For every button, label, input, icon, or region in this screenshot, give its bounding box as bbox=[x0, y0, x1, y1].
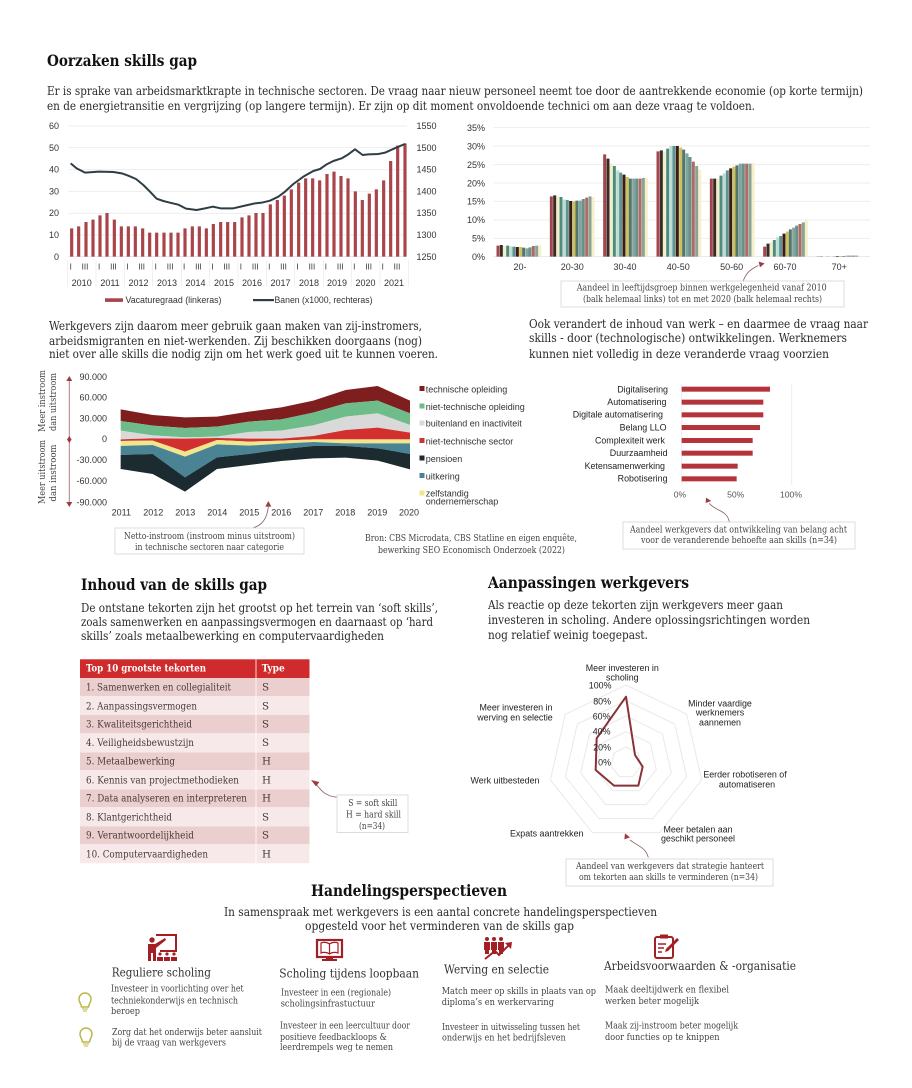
line and bar chart: vacaturegraad en banen: III bbox=[82, 262, 88, 272]
area chart: netto-instroom bbox=[76, 372, 419, 518]
callout: aandeel werkgevers strategie: Aandeel van werkgevers dat strategie hanteert bbox=[575, 861, 764, 872]
bar chart: ontwikkelingen van belang: Duurzaamheid bbox=[610, 448, 668, 458]
callout: soft skill en hard skill: (n=34) bbox=[359, 821, 385, 832]
text block: zij-instromers: niet over alle skills die nodig zijn om het werk goed uit te kunnen voeren. bbox=[49, 347, 438, 361]
bar chart: aandeel per leeftijdsgroep: 20% bbox=[467, 178, 485, 188]
arrow: naar radar chart bbox=[624, 833, 648, 857]
line and bar chart: vacaturegraad en banen: III bbox=[252, 262, 259, 272]
legend: area chart: uitkering bbox=[426, 471, 460, 481]
arrow: naar area chart bbox=[253, 501, 271, 528]
line and bar chart: vacaturegraad en banen: III bbox=[337, 262, 344, 272]
callout: aandeel werkgevers strategie: om tekorten aan skills te verminderen (n=34) bbox=[579, 872, 758, 883]
y-axis direction labels and arrow bbox=[37, 370, 72, 507]
radar chart: strategieen werkgevers: werving en selectie bbox=[476, 713, 553, 723]
text block: aanpassingen bbox=[487, 598, 810, 642]
line and bar chart: vacaturegraad en banen: I bbox=[240, 262, 242, 272]
table: top 10 grootste tekorten: S bbox=[262, 812, 269, 824]
table: top 10 grootste tekorten: 6. Kennis van projectmethodieken bbox=[86, 774, 239, 786]
column: scholing tijdens loopbaan: Investeer in een (regionale) bbox=[281, 988, 391, 999]
radar chart: strategieen werkgevers: Meer investeren in bbox=[479, 703, 553, 713]
bar chart: aandeel per leeftijdsgroep: 30% bbox=[467, 141, 485, 151]
table: top 10 grootste tekorten: 10. Computervaardigheden bbox=[86, 848, 208, 860]
line and bar chart: vacaturegraad en banen: III bbox=[394, 262, 400, 272]
line and bar chart: vacaturegraad en banen: 2016 bbox=[242, 278, 262, 288]
icon: docent voor bord bbox=[148, 935, 177, 961]
column: werving en selectie bbox=[442, 961, 596, 1044]
line and bar chart: vacaturegraad en banen: III bbox=[138, 262, 145, 272]
icon: monitor met boek bbox=[317, 940, 342, 961]
radar chart: strategieen werkgevers: 80% bbox=[593, 696, 611, 706]
column: arbeidsvoorwaarden en -organisatie: Maak deeltijdwerk en flexibel bbox=[605, 985, 729, 996]
arrow: naar tabel bbox=[311, 780, 338, 797]
line and bar chart: vacaturegraad en banen: 1400 bbox=[416, 186, 437, 196]
table: top 10 grootste tekorten bbox=[80, 659, 310, 863]
text block: inhoud: skills’ zoals metaalbewerking en computervaardigheden bbox=[81, 629, 384, 643]
radar chart: strategieen werkgevers: automatiseren bbox=[719, 779, 775, 789]
line and bar chart: vacaturegraad en banen: III bbox=[195, 262, 202, 272]
text block: inhoud van werk: Ook verandert de inhoud van werk – en daarmee de vraag naar bbox=[529, 317, 868, 331]
column: arbeidsvoorwaarden en -organisatie: werken beter mogelijk bbox=[605, 996, 699, 1007]
icon: klembord met pen bbox=[655, 934, 679, 958]
bar chart: ontwikkelingen van belang: Automatisering bbox=[607, 397, 667, 407]
area chart: netto-instroom: 2014 bbox=[207, 508, 227, 518]
line and bar chart: vacaturegraad en banen: 2011 bbox=[100, 278, 120, 288]
line and bar chart: vacaturegraad en banen: 10 bbox=[49, 230, 59, 240]
bar chart: ontwikkelingen van belang: Belang LLO bbox=[620, 423, 667, 433]
y-axis direction labels and arrow: Meer instroom bbox=[37, 370, 48, 432]
table: top 10 grootste tekorten: H bbox=[262, 755, 271, 767]
y-axis direction labels and arrow: dan uitstroom bbox=[48, 373, 59, 431]
callout: netto-instroom bbox=[115, 528, 304, 554]
line and bar chart: vacaturegraad en banen: III bbox=[167, 262, 173, 272]
area chart: netto-instroom: 0 bbox=[102, 434, 107, 444]
text block: inhoud van werk: skills - door (technologische) ontwikkelingen. Werknemers bbox=[529, 331, 847, 345]
line and bar chart: vacaturegraad en banen: 20 bbox=[49, 208, 59, 218]
text block: inhoud bbox=[81, 601, 438, 643]
area chart: netto-instroom: 2020 bbox=[399, 508, 419, 518]
line and bar chart: vacaturegraad en banen: I bbox=[353, 262, 355, 272]
bar chart: ontwikkelingen van belang: 100% bbox=[780, 489, 802, 499]
heading: Inhoud van de skills gap: Inhoud van de skills gap bbox=[81, 575, 267, 594]
text block: inhoud van werk bbox=[529, 317, 868, 361]
text block: aanpassingen: Als reactie op deze tekorten zijn werkgevers meer gaan bbox=[487, 598, 783, 612]
line and bar chart: vacaturegraad en banen: I bbox=[70, 262, 72, 272]
radar chart: strategieen werkgevers: Eerder robotiseren of bbox=[703, 769, 787, 779]
legend: line chart bbox=[105, 295, 372, 305]
column: reguliere scholing: Investeer in voorlichting over het bbox=[111, 984, 244, 995]
callout: soft skill en hard skill: S = soft skill bbox=[348, 798, 397, 809]
area chart: netto-instroom: 2011 bbox=[112, 508, 131, 518]
column: werving en selectie: Match meer op skills in plaats van op bbox=[442, 986, 596, 997]
table: top 10 grootste tekorten: H bbox=[262, 793, 271, 805]
table: top 10 grootste tekorten: S bbox=[262, 737, 269, 749]
callout: ontwikkeling van belang: voor de veranderende behoefte aan skills (n=34) bbox=[640, 535, 837, 546]
line and bar chart: vacaturegraad en banen: 30 bbox=[49, 186, 59, 196]
line and bar chart: vacaturegraad en banen: 2015 bbox=[214, 278, 234, 288]
callout: aandeel in leeftijdsgroep: (balk helemaal links) tot en met 2020 (balk helemaal rechts) bbox=[583, 294, 822, 305]
radar chart: strategieen werkgevers: werknemers bbox=[695, 708, 745, 718]
callout: ontwikkeling van belang: Aandeel werkgevers dat ontwikkeling van belang acht bbox=[629, 525, 847, 536]
radar chart: strategieen werkgevers: 20% bbox=[593, 743, 611, 753]
area chart: netto-instroom: 2016 bbox=[271, 508, 291, 518]
legend: line chart: Banen (x1000, rechteras) bbox=[274, 295, 372, 305]
bar chart: aandeel per leeftijdsgroep: 50-60 bbox=[720, 262, 743, 272]
table: top 10 grootste tekorten: H bbox=[262, 774, 271, 786]
line and bar chart: vacaturegraad en banen: I bbox=[268, 262, 270, 272]
bar chart: ontwikkelingen van belang: Complexiteit werk bbox=[595, 435, 666, 445]
radar chart: strategieen werkgevers: 40% bbox=[593, 727, 611, 737]
radar chart: strategieen werkgevers: geschikt personeel bbox=[661, 834, 735, 844]
table: top 10 grootste tekorten: Top 10 grootste tekorten bbox=[86, 663, 206, 675]
line and bar chart: vacaturegraad en banen: 1350 bbox=[416, 208, 437, 218]
area chart: netto-instroom: 2013 bbox=[175, 508, 195, 518]
line and bar chart: vacaturegraad en banen: 1300 bbox=[416, 230, 437, 240]
column: arbeidsvoorwaarden en -organisatie: Maak zij-instroom beter mogelijk bbox=[605, 1021, 738, 1032]
callout: aandeel werkgevers strategie bbox=[566, 859, 773, 886]
intro text block: en de energietransitie en vergrijzing (op langere termijn). Er zijn op dit moment onvoldoende technici om aan deze vraag te voldoen. bbox=[47, 99, 755, 113]
bar chart: ontwikkelingen van belang: Digitalisering bbox=[617, 385, 668, 395]
column: reguliere scholing: bij de vraag van werkgevers bbox=[112, 1038, 226, 1049]
line and bar chart: vacaturegraad en banen bbox=[49, 121, 437, 305]
line and bar chart: vacaturegraad en banen: 2021 bbox=[384, 278, 404, 288]
bar chart: aandeel per leeftijdsgroep: 0% bbox=[472, 252, 485, 262]
area chart: netto-instroom: -60.000 bbox=[76, 476, 107, 486]
bar chart: aandeel per leeftijdsgroep: 20-30 bbox=[561, 262, 584, 272]
source note bbox=[365, 533, 577, 556]
line and bar chart: vacaturegraad en banen: 1500 bbox=[416, 143, 437, 153]
bar chart: aandeel per leeftijdsgroep: 40-50 bbox=[667, 262, 690, 272]
legend: area chart: niet-technische sector bbox=[426, 437, 513, 447]
radar chart: strategieen werkgevers: 100% bbox=[589, 680, 612, 690]
text block: aanpassingen: investeren in scholing. Andere oplossingsrichtingen worden bbox=[488, 613, 810, 627]
callout: netto-instroom: in technische sectoren naar categorie bbox=[135, 542, 284, 553]
table: top 10 grootste tekorten: 5. Metaalbewerking bbox=[86, 755, 175, 767]
text block: zij-instromers: arbeidsmigranten en niet-werkenden. Zij beschikken doorgaans (nog) bbox=[49, 334, 422, 348]
column: werving en selectie: Investeer in uitwisseling tussen het bbox=[442, 1022, 580, 1033]
icon: lamp 2 bbox=[80, 1028, 92, 1046]
line and bar chart: vacaturegraad en banen: 2014 bbox=[185, 278, 206, 288]
table: top 10 grootste tekorten: 8. Klantgerichtheid bbox=[86, 812, 172, 824]
radar chart: strategieen werkgevers bbox=[471, 663, 787, 844]
bar chart: aandeel per leeftijdsgroep bbox=[467, 123, 870, 272]
intro text block bbox=[47, 84, 863, 113]
column: reguliere scholing: beroep bbox=[111, 1006, 140, 1017]
line and bar chart: vacaturegraad en banen: I bbox=[325, 262, 327, 272]
line and bar chart: vacaturegraad en banen: 1450 bbox=[416, 165, 437, 175]
legend: area chart: ondernemerschap bbox=[426, 496, 498, 506]
column: werving en selectie: diploma’s en werkervaring bbox=[442, 997, 554, 1008]
line and bar chart: vacaturegraad en banen: 2010 bbox=[72, 278, 92, 288]
text block: handelingsperspectieven intro: In samenspraak met werkgevers is een aantal concrete handelingsperspectieven bbox=[224, 905, 657, 919]
line and bar chart: vacaturegraad en banen: I bbox=[155, 262, 157, 272]
area chart: netto-instroom: -30.000 bbox=[76, 455, 107, 465]
table: top 10 grootste tekorten: 2. Aanpassingsvermogen bbox=[86, 701, 197, 713]
line and bar chart: vacaturegraad en banen: 2012 bbox=[128, 278, 149, 288]
text block: zij-instromers bbox=[49, 319, 438, 361]
callout: soft skill en hard skill: H = hard skill bbox=[346, 810, 401, 820]
radar chart: strategieen werkgevers: Meer betalen aan bbox=[663, 825, 733, 835]
column: arbeidsvoorwaarden en -organisatie: door functies op te knippen bbox=[605, 1032, 720, 1043]
line and bar chart: vacaturegraad en banen: 50 bbox=[49, 143, 59, 153]
table: top 10 grootste tekorten: 3. Kwaliteitsgerichtheid bbox=[86, 718, 192, 730]
icon: mensen en stijgende pijl bbox=[484, 937, 512, 959]
icon: lamp 1 bbox=[79, 993, 91, 1011]
line and bar chart: vacaturegraad en banen: I bbox=[211, 262, 214, 272]
line and bar chart: vacaturegraad en banen: 1250 bbox=[416, 252, 437, 262]
line and bar chart: vacaturegraad en banen: III bbox=[110, 262, 117, 272]
bar chart: aandeel per leeftijdsgroep: 30-40 bbox=[613, 262, 637, 272]
line and bar chart: vacaturegraad en banen: III bbox=[280, 262, 287, 272]
legend: area chart: zelfstandig bbox=[426, 489, 469, 499]
radar chart: strategieen werkgevers: Meer investeren in bbox=[586, 663, 659, 673]
area chart: netto-instroom: 2017 bbox=[303, 508, 323, 518]
area chart: netto-instroom: 2018 bbox=[335, 508, 355, 518]
radar chart: strategieen werkgevers: 0% bbox=[598, 758, 611, 768]
text block: handelingsperspectieven intro: opgesteld voor het verminderen van de skills gap bbox=[305, 919, 574, 933]
area chart: netto-instroom: 2019 bbox=[367, 508, 387, 518]
column: werving en selectie: onderwijs en het bedrijfsleven bbox=[442, 1033, 566, 1044]
text block: inhoud: zoals samenwerken en aanpassingsvermogen en daarnaast op ‘hard bbox=[81, 615, 433, 629]
bar chart: aandeel per leeftijdsgroep: 5% bbox=[472, 234, 485, 244]
column: reguliere scholing: Reguliere scholing bbox=[112, 965, 211, 980]
bar chart: aandeel per leeftijdsgroep: 10% bbox=[467, 215, 485, 225]
column: reguliere scholing: Zorg dat het onderwijs beter aansluit bbox=[112, 1027, 262, 1038]
bar chart: ontwikkelingen van belang: Robotisering bbox=[618, 474, 668, 484]
legend: line chart: Vacaturegraad (linkeras) bbox=[126, 295, 222, 305]
callout: ontwikkeling van belang bbox=[623, 522, 855, 549]
area chart: netto-instroom: 90.000 bbox=[79, 372, 107, 382]
legend: area chart bbox=[420, 385, 525, 506]
table: top 10 grootste tekorten: S bbox=[262, 701, 269, 713]
column: scholing tijdens loopbaan: Scholing tijdens loopbaan bbox=[279, 966, 419, 981]
radar chart: strategieen werkgevers: Minder vaardige bbox=[688, 699, 752, 709]
radar chart: strategieen werkgevers: Werk uitbesteden bbox=[471, 775, 540, 785]
table: top 10 grootste tekorten: S bbox=[262, 682, 269, 694]
line and bar chart: vacaturegraad en banen: 2018 bbox=[299, 278, 319, 288]
bar chart: ontwikkelingen van belang bbox=[573, 383, 802, 499]
callout: aandeel in leeftijdsgroep bbox=[561, 281, 844, 307]
bar chart: ontwikkelingen van belang: 50% bbox=[727, 489, 745, 499]
legend: area chart: buitenland en inactiviteit bbox=[426, 419, 522, 429]
radar chart: strategieen werkgevers: Expats aantrekken bbox=[510, 829, 584, 839]
line and bar chart: vacaturegraad en banen: I bbox=[183, 262, 185, 272]
text block: inhoud van werk: kunnen niet volledig in deze veranderde vraag voorzien bbox=[529, 347, 829, 361]
legend: area chart: pensioen bbox=[426, 454, 462, 464]
callout: aandeel in leeftijdsgroep: Aandeel in leeftijdsgroep binnen werkgelegenheid vanaf 2010 bbox=[576, 283, 827, 294]
bar chart: aandeel per leeftijdsgroep: 15% bbox=[467, 197, 485, 207]
bar chart: ontwikkelingen van belang: 0% bbox=[674, 489, 687, 499]
table: top 10 grootste tekorten: 7. Data analyseren en interpreteren bbox=[86, 793, 247, 805]
area chart: netto-instroom: -90.000 bbox=[76, 498, 107, 508]
callout: netto-instroom: Netto-instroom (instroom minus uitstroom) bbox=[124, 531, 295, 542]
line and bar chart: vacaturegraad en banen: I bbox=[126, 262, 129, 272]
table: top 10 grootste tekorten: 4. Veiligheidsbewustzijn bbox=[86, 737, 194, 749]
radar chart: strategieen werkgevers: aannemen bbox=[699, 718, 741, 728]
bar chart: aandeel per leeftijdsgroep: 60-70 bbox=[773, 262, 797, 272]
area chart: netto-instroom: 2015 bbox=[239, 508, 259, 518]
y-axis direction labels and arrow: dan instroom bbox=[48, 444, 59, 502]
bar chart: ontwikkelingen van belang: Digitale automatisering bbox=[573, 410, 663, 420]
bar chart: aandeel per leeftijdsgroep: 35% bbox=[467, 123, 485, 133]
banen line bbox=[71, 144, 405, 210]
column: arbeidsvoorwaarden en -organisatie: Arbeidsvoorwaarden & -organisatie bbox=[603, 958, 796, 973]
column: scholing tijdens loopbaan bbox=[279, 966, 419, 1053]
line and bar chart: vacaturegraad en banen: III bbox=[223, 262, 230, 272]
line and bar chart: vacaturegraad en banen: 1550 bbox=[416, 121, 437, 131]
line and bar chart: vacaturegraad en banen: 2013 bbox=[157, 278, 177, 288]
line and bar chart: vacaturegraad en banen: I bbox=[382, 262, 384, 272]
radar chart: strategieen werkgevers: scholing bbox=[606, 672, 639, 682]
column: reguliere scholing bbox=[111, 965, 262, 1049]
line and bar chart: vacaturegraad en banen: 40 bbox=[49, 165, 59, 175]
text block: inhoud: De ontstane tekorten zijn het grootst op het terrein van ‘soft skills’, bbox=[81, 601, 438, 615]
area chart: netto-instroom: 2012 bbox=[143, 508, 163, 518]
column: scholing tijdens loopbaan: positieve feedbackloops & bbox=[280, 1032, 387, 1043]
area chart: netto-instroom: 60.000 bbox=[79, 393, 107, 403]
line and bar chart: vacaturegraad en banen: III bbox=[365, 262, 372, 272]
source note: Bron: CBS Microdata, CBS Statline en eigen enquête, bbox=[365, 533, 577, 544]
column: scholing tijdens loopbaan: leerdrempels weg te nemen bbox=[280, 1042, 393, 1053]
legend: area chart: technische opleiding bbox=[426, 385, 507, 395]
column: werving en selectie: Werving en selectie bbox=[444, 961, 549, 976]
table: top 10 grootste tekorten: 1. Samenwerken en collegialiteit bbox=[86, 682, 232, 694]
bar chart: ontwikkelingen van belang: Ketensamenwerking bbox=[585, 461, 665, 471]
table: top 10 grootste tekorten: H bbox=[262, 848, 271, 860]
line and bar chart: vacaturegraad en banen: 2019 bbox=[327, 278, 347, 288]
line and bar chart: vacaturegraad en banen: III bbox=[309, 262, 315, 272]
line and bar chart: vacaturegraad en banen: I bbox=[98, 262, 100, 272]
line and bar chart: vacaturegraad en banen: 2020 bbox=[355, 278, 376, 288]
line and bar chart: vacaturegraad en banen: 0 bbox=[54, 252, 59, 262]
y-axis direction labels and arrow: Meer uitstroom bbox=[37, 440, 48, 504]
text block: zij-instromers: Werkgevers zijn daarom meer gebruik gaan maken van zij-instromers, bbox=[49, 319, 422, 333]
table: top 10 grootste tekorten: S bbox=[262, 718, 269, 730]
text block: handelingsperspectieven intro bbox=[224, 905, 657, 933]
line and bar chart: vacaturegraad en banen: 2017 bbox=[270, 278, 291, 288]
line and bar chart: vacaturegraad en banen: 60 bbox=[49, 121, 59, 131]
column: reguliere scholing: techniekonderwijs en technisch bbox=[111, 996, 238, 1007]
heading: Handelingsperspectieven: Handelingsperspectieven bbox=[311, 881, 507, 900]
arrow: naar leeftijdsgrafiek bbox=[743, 262, 765, 281]
title: Oorzaken skills gap: Oorzaken skills gap bbox=[47, 51, 197, 70]
area chart: netto-instroom: 30.000 bbox=[79, 414, 107, 424]
bar chart: aandeel per leeftijdsgroep: 20- bbox=[513, 262, 527, 272]
table: top 10 grootste tekorten: Type bbox=[262, 663, 285, 675]
bar chart: aandeel per leeftijdsgroep: 70+ bbox=[832, 262, 847, 272]
vacaturegraad bars bbox=[72, 143, 405, 257]
radar chart: strategieen werkgevers: 60% bbox=[593, 711, 611, 721]
callout: soft skill en hard skill bbox=[337, 795, 408, 832]
line and bar chart: vacaturegraad en banen: I bbox=[296, 262, 299, 272]
bar chart: aandeel per leeftijdsgroep: 25% bbox=[467, 160, 485, 170]
legend: area chart: niet-technische opleiding bbox=[426, 402, 525, 412]
column: scholing tijdens loopbaan: Investeer in een leercultuur door bbox=[280, 1021, 410, 1032]
column: arbeidsvoorwaarden en -organisatie bbox=[603, 958, 796, 1043]
table: top 10 grootste tekorten: 9. Verantwoordelijkheid bbox=[86, 830, 194, 842]
heading: Aanpassingen werkgevers: Aanpassingen werkgevers bbox=[487, 573, 689, 592]
source note: bewerking SEO Economisch Onderzoek (2022) bbox=[378, 545, 565, 556]
text block: aanpassingen: nog relatief weinig toegepast. bbox=[488, 628, 648, 642]
table: top 10 grootste tekorten: S bbox=[262, 830, 269, 842]
column: scholing tijdens loopbaan: scholingsinfrastuctuur bbox=[281, 999, 375, 1010]
arrow: naar bar chart bbox=[706, 498, 729, 522]
